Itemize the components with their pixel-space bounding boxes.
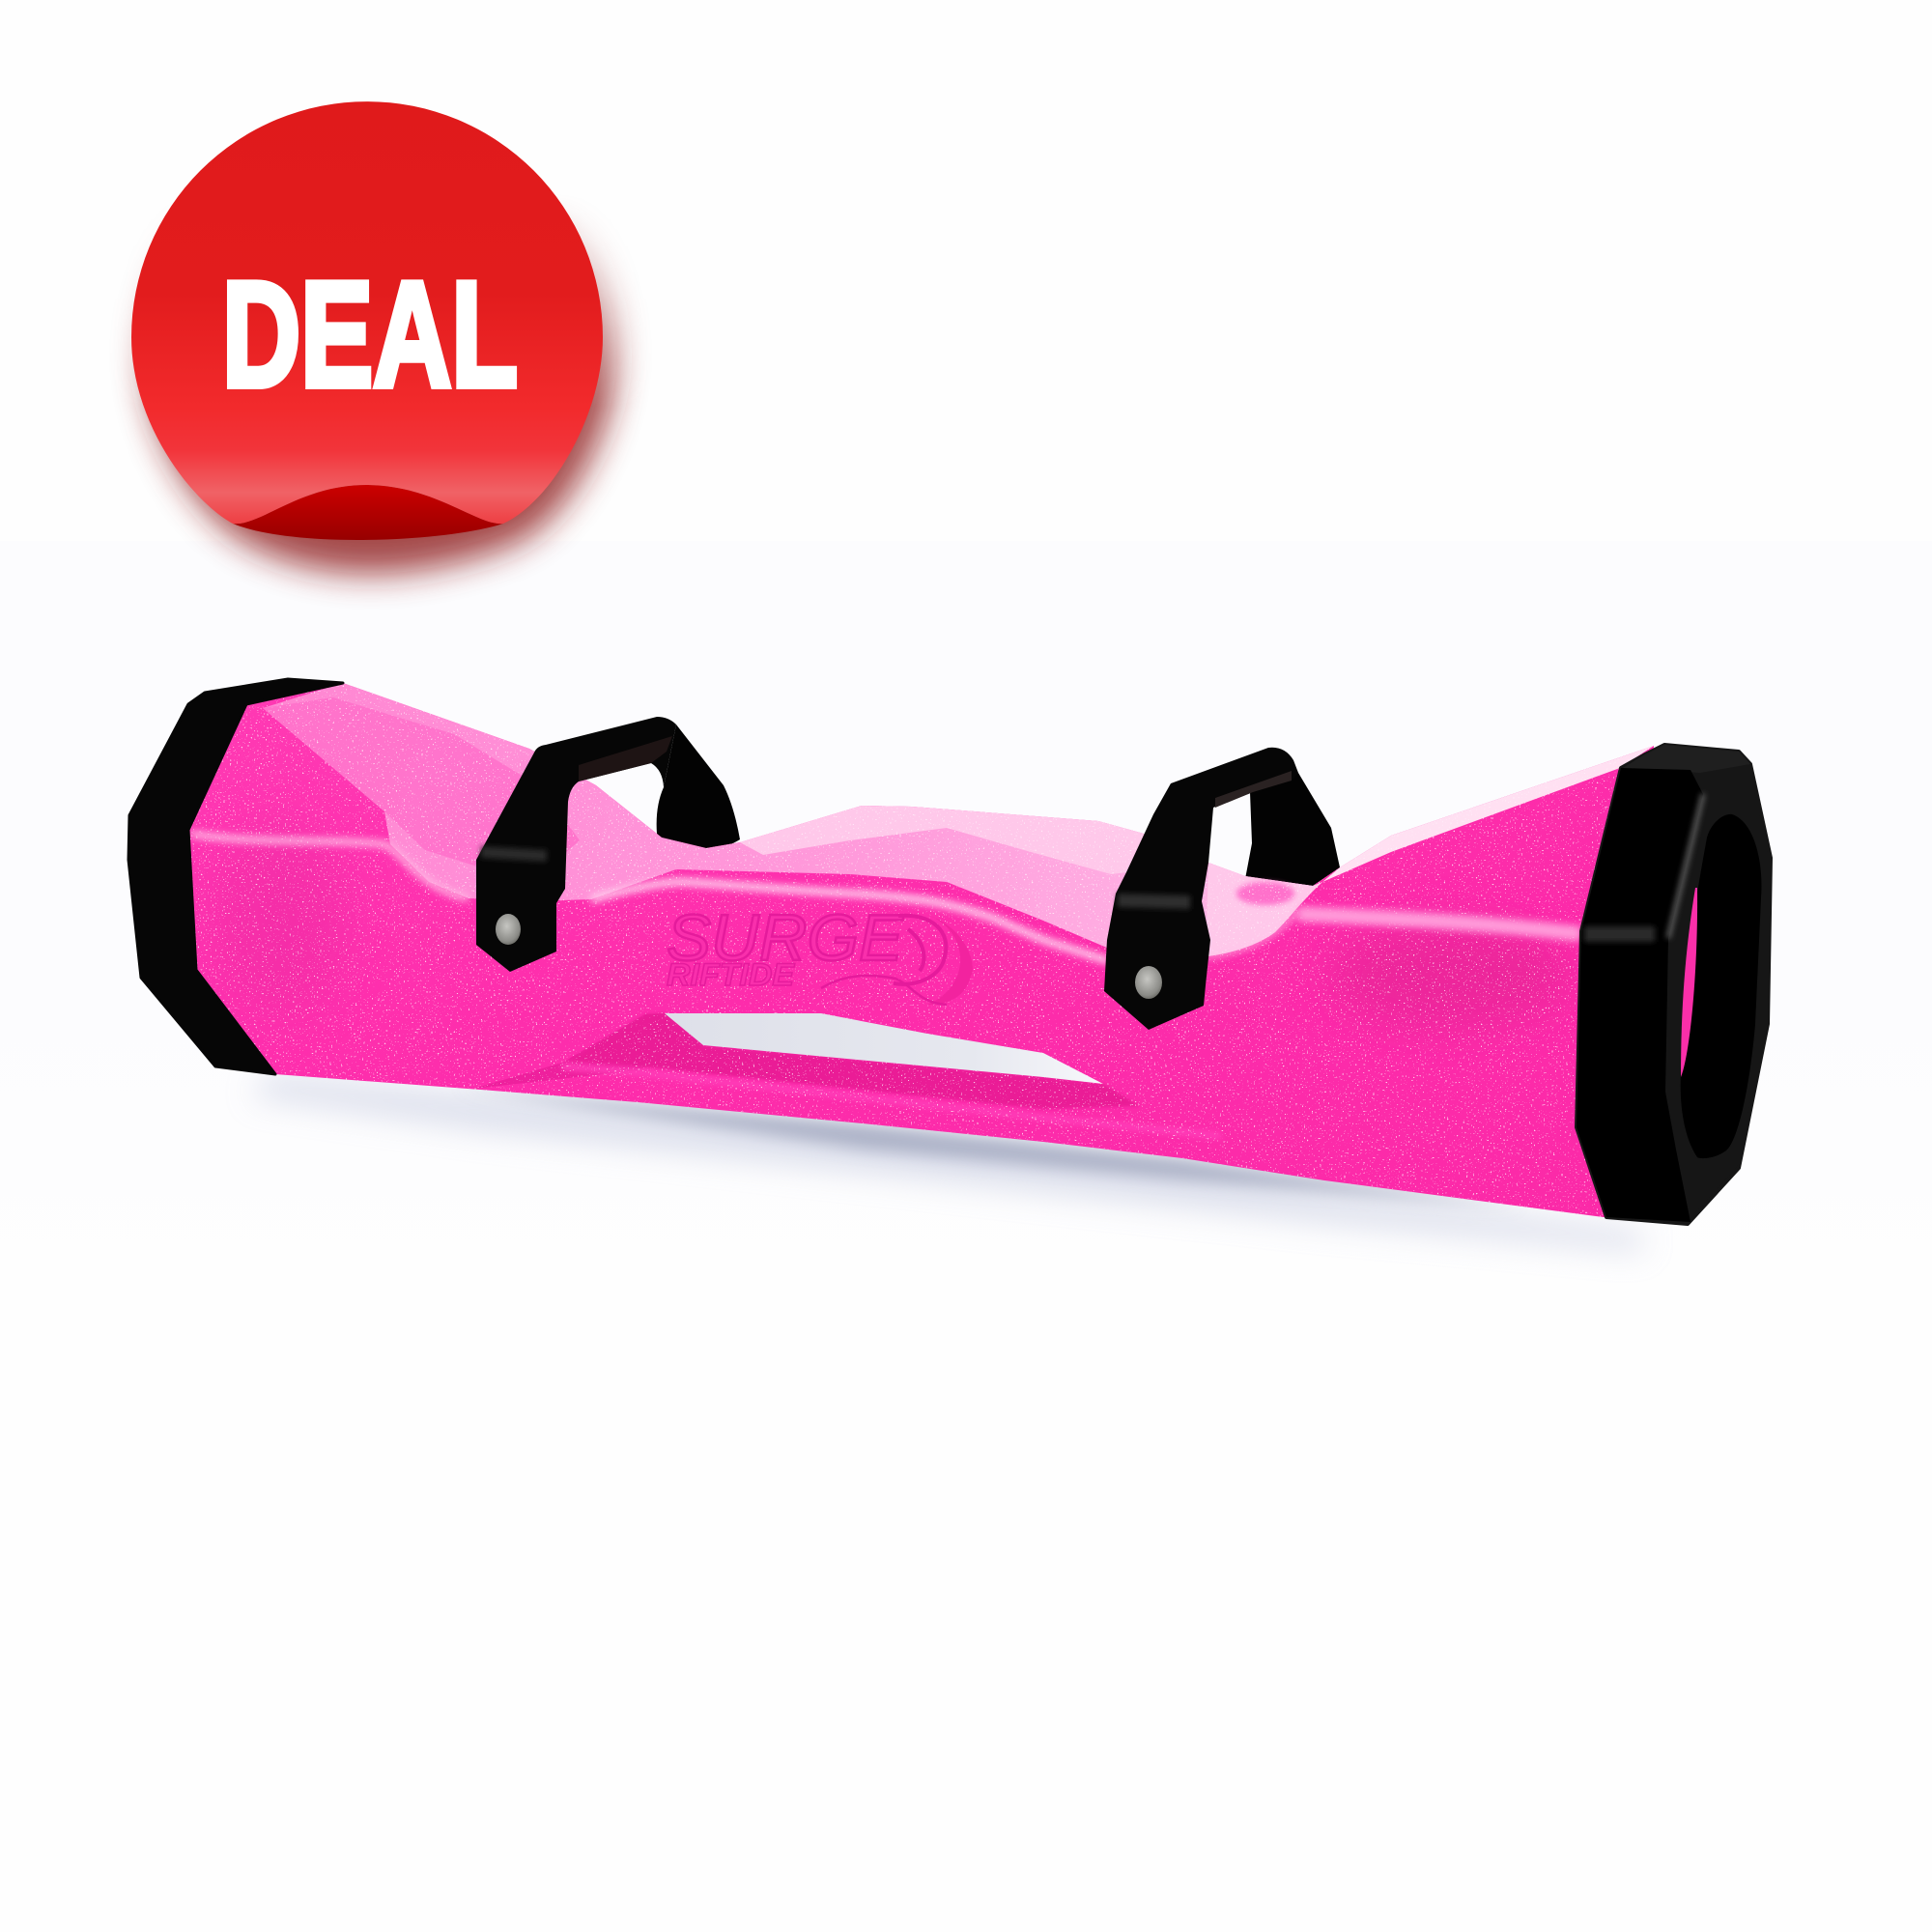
- badge: DEAL sticker: [131, 101, 616, 574]
- left handle: [476, 717, 676, 972]
- shadow spot under far leg: [1236, 882, 1294, 905]
- cap top facet: [1623, 745, 1750, 773]
- pale facet right of handle: [1206, 863, 1322, 956]
- inner pink crescent: [1681, 888, 1697, 1077]
- badge shadow: [145, 121, 616, 574]
- right handle inner bar: [1215, 771, 1292, 808]
- ground shadow core: [454, 1088, 1526, 1208]
- right handle highlight: [1118, 900, 1190, 902]
- logo wave: [821, 976, 947, 1005]
- cap face edge highlight: [1668, 794, 1703, 938]
- left handle screw: [496, 914, 521, 945]
- logo wordmark: SURGE: [667, 901, 904, 975]
- cap side face: [1577, 768, 1703, 1222]
- infographic canvas: [120, 101, 1773, 1260]
- cap hollow: [1681, 814, 1761, 1158]
- ground shadow: [251, 1074, 1642, 1251]
- lower ramp: [473, 1013, 703, 1089]
- crease highlight: left: [191, 834, 469, 898]
- floor band: [0, 541, 1932, 1343]
- far handle leg of right handle: [1245, 763, 1340, 887]
- left shoulder mid facet: [263, 697, 580, 874]
- right pale top facet: [1322, 746, 1654, 882]
- body silhouette: [184, 676, 1662, 1227]
- dark shade on left face: [213, 821, 348, 1014]
- far handle leg of left handle: [657, 724, 740, 850]
- left handle highlight: [481, 852, 547, 856]
- upper facets: [263, 683, 1322, 956]
- pale centre facet: [740, 806, 1208, 874]
- logo subtitle: RIFTIDE: [667, 957, 796, 992]
- crease highlight: right: [1298, 914, 1581, 934]
- dark shade on right face: [1328, 923, 1570, 1029]
- crease highlight: centre: [591, 882, 1109, 961]
- logo outer crescent: [927, 915, 973, 1005]
- badge text: DEAL: [222, 251, 518, 417]
- badge disc: [131, 101, 603, 524]
- logo arcs: [894, 916, 946, 984]
- logo: Surge Riftide emboss: [667, 901, 973, 1005]
- right handle screw: [1135, 966, 1162, 999]
- left handle inner bar: [579, 736, 672, 781]
- window under body: [665, 1013, 1103, 1084]
- crease highlight: right notch: [1206, 910, 1298, 956]
- cap horizontal highlight: [1584, 926, 1655, 942]
- glitter: [184, 676, 1662, 1227]
- lower bar inner shadow: [570, 1013, 1140, 1109]
- left end cap: [128, 679, 343, 1074]
- product: pink Surge Riftide water bag: [128, 676, 1771, 1251]
- right end cap: [1577, 745, 1771, 1224]
- lower bar ridge: [562, 1066, 1221, 1136]
- right handle: [1104, 748, 1298, 1030]
- badge flap: [233, 485, 503, 540]
